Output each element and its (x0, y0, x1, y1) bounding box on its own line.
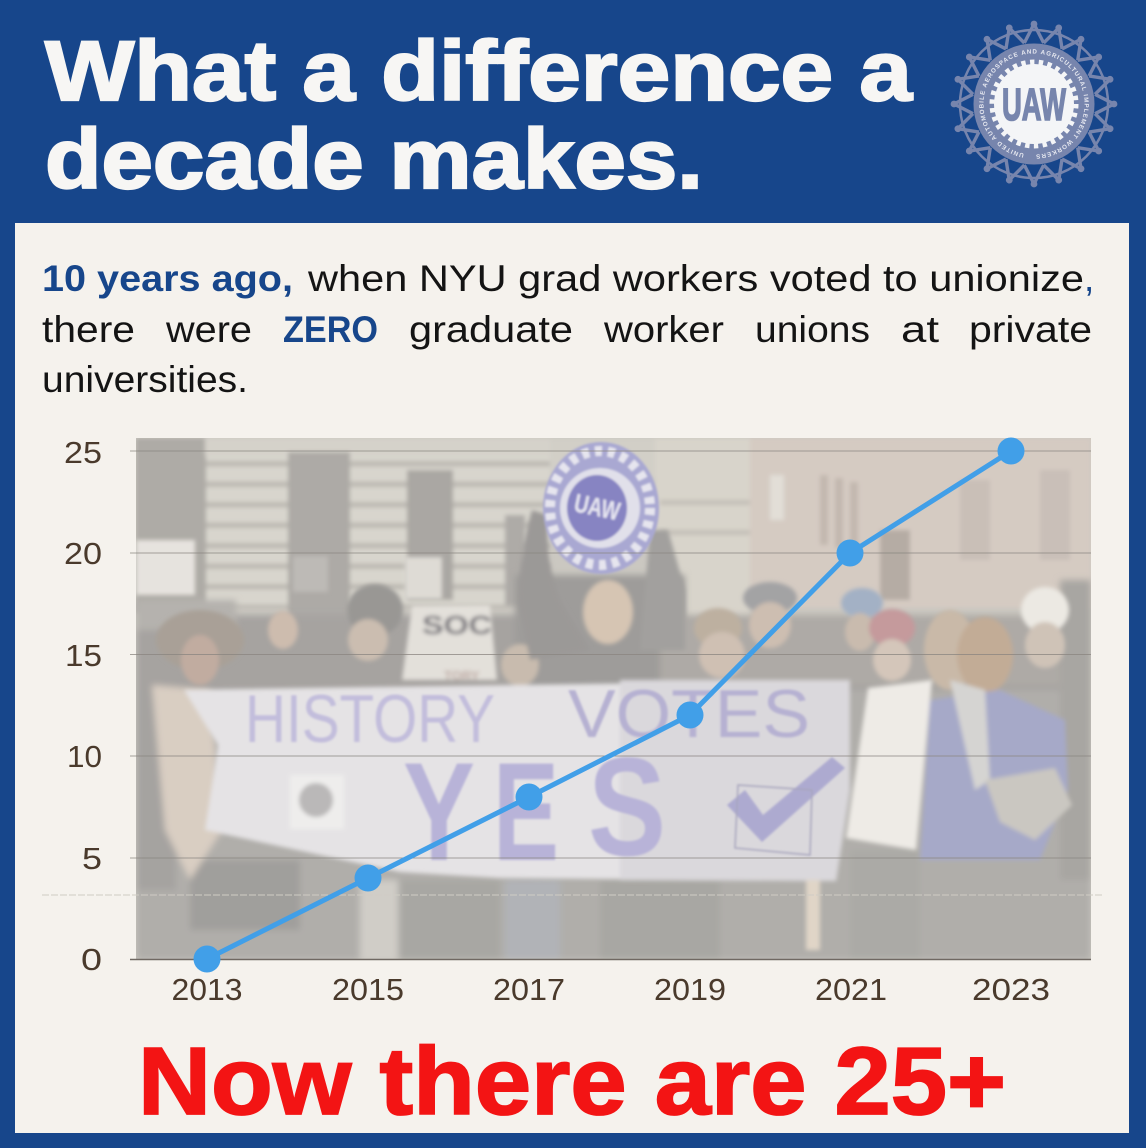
y axis labels: 25 (64, 435, 102, 470)
x axis labels: 2017 (493, 972, 565, 1007)
banner lettering: Y (403, 733, 475, 890)
crowd (136, 615, 1091, 700)
line chart: graduate worker unions 2013 to 2023 (64, 435, 1091, 1007)
banner lettering: S (588, 728, 666, 885)
white paper (846, 680, 932, 850)
intro text block: , (1084, 258, 1094, 299)
title: decade makes. (45, 112, 703, 206)
x axis labels: 2019 (654, 972, 726, 1007)
intro text block: were (165, 309, 252, 350)
title: What a difference a (45, 24, 913, 118)
sign pole (806, 880, 820, 950)
UAW sign in photo (543, 442, 659, 574)
chart grid (130, 451, 1091, 858)
intro text block: graduate (409, 309, 573, 350)
y axis labels: 5 (82, 841, 102, 876)
intro text block: unions (755, 309, 870, 350)
UAW sign in photo: UAW (572, 488, 623, 527)
blue jacket (920, 690, 1068, 860)
intro text block: at (901, 309, 940, 350)
panel: content card (15, 223, 1129, 1133)
faint dashed line across photo (42, 894, 1104, 896)
banner (184, 680, 850, 881)
intro text block: 10 years ago, (42, 258, 293, 299)
banner lettering: HISTORY (245, 681, 495, 757)
y axis labels: 10 (67, 739, 102, 774)
callout: now there are 25+: Now there are 25+ (138, 1028, 1006, 1135)
banner lettering (249, 688, 845, 861)
y axis labels: 20 (64, 536, 102, 571)
x axis labels: 2013 (172, 972, 242, 1007)
wall signs (136, 540, 195, 595)
banner logo (292, 777, 342, 827)
intro text block: when NYU grad workers voted to unionize (307, 258, 1084, 299)
y axis labels (64, 435, 102, 977)
intro text block: there (42, 309, 135, 350)
x axis labels: 2023 (972, 972, 1050, 1007)
data line (207, 451, 1011, 959)
x axis labels (172, 972, 1050, 1007)
photo: faded rally background: TORY (444, 668, 480, 683)
raised arms (520, 509, 554, 661)
intro text block: worker (603, 309, 724, 350)
intro text block: private (969, 309, 1092, 350)
x axis labels: 2015 (332, 972, 404, 1007)
SOC sign (402, 605, 497, 680)
lower crowd legs (136, 690, 1091, 960)
y axis labels: 15 (65, 638, 102, 673)
intro text block (42, 258, 1094, 400)
y axis labels: 0 (81, 942, 102, 977)
bag (985, 768, 1072, 840)
title (45, 24, 913, 206)
x axis labels: 2021 (815, 972, 887, 1007)
faces and hats (158, 610, 241, 662)
banner lettering: VOTES (568, 676, 810, 752)
icon: UAW logo (950, 20, 1118, 188)
intro text block: ZERO (283, 309, 378, 350)
photo: faded rally background (136, 438, 1091, 960)
intro text block: universities. (42, 359, 248, 400)
icon: UAW logo: UAW (1002, 79, 1066, 130)
tan banner side (152, 685, 222, 880)
data points (194, 438, 1024, 972)
banner lettering: E (493, 733, 559, 890)
photo: faded rally background: SOC (422, 610, 492, 640)
